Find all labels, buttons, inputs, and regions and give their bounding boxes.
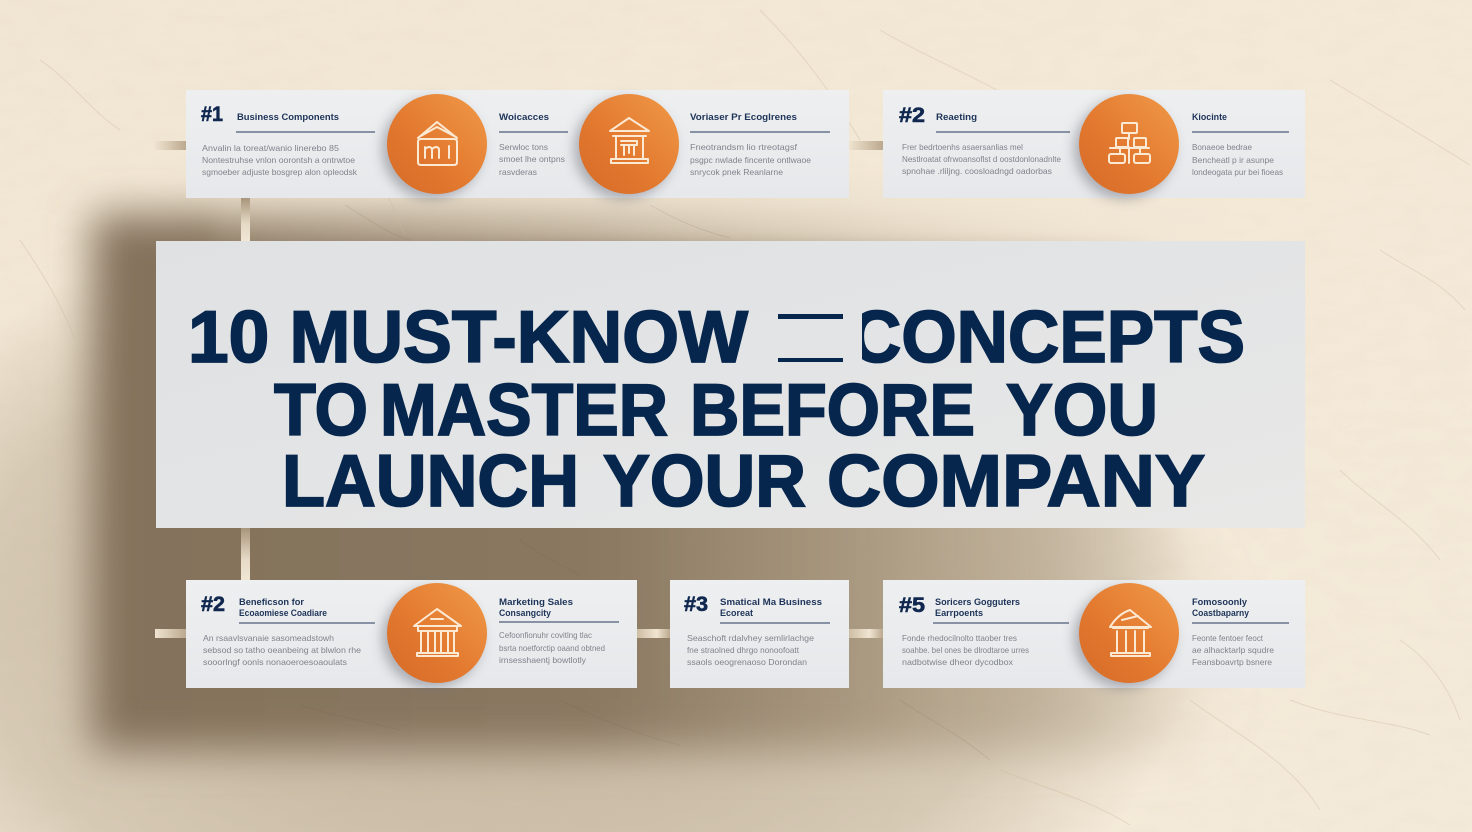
heading — [935, 597, 1020, 619]
body right: Feonte fentoer feoct — [1192, 633, 1264, 643]
panel: card 4 bottom middle — [670, 580, 849, 688]
panel: card 2 top right — [883, 90, 1305, 199]
body 3: psgpc nwlade fincente ontlwaoe — [690, 155, 811, 165]
body right: Feansboavrtp bsnere — [1192, 657, 1272, 667]
title: CONCEPTS — [850, 297, 1245, 378]
body 3: snrycok pnek Reanlarne — [690, 167, 783, 177]
icon: house — [382, 94, 487, 199]
heading: Smatical Ma Business — [720, 597, 822, 608]
body 2: Serwloc tons — [499, 142, 548, 152]
body right: ae alhacktarlp squdre — [1192, 645, 1274, 655]
body — [902, 142, 1061, 176]
heading: Ecoreat — [720, 608, 754, 619]
body — [203, 633, 361, 667]
number #1: #1 — [201, 103, 223, 126]
icon: org blocks — [1074, 94, 1179, 199]
body: nadbotwise dheor dycodbox — [902, 657, 1014, 667]
heading — [720, 597, 822, 619]
body — [687, 633, 814, 667]
connector bars — [155, 141, 883, 638]
body: soahbe. bel ones be dlrodtaroe urres — [902, 645, 1029, 655]
number #2: #2 — [201, 593, 225, 616]
body: Nestlroatat ofrwoansoflst d oostdonlonadnlte — [902, 154, 1061, 164]
body 1: Nontestruhse vnlon oorontsh a ontrwtoe — [202, 155, 355, 165]
body right: Bencheatl p ir asunpe — [1192, 155, 1274, 165]
title: MASTER — [380, 370, 668, 451]
body right: irnsesshaentj bowtlotly — [499, 655, 587, 665]
heading right: Marketing Sales — [499, 597, 573, 608]
number #2: #2 — [899, 104, 925, 127]
body right: londeogata pur bei fioeas — [1192, 167, 1283, 177]
heading right: Coastbaparny — [1192, 608, 1250, 619]
body 2 — [499, 142, 565, 177]
heading 3: Voriaser Pr Ecoglrenes — [690, 112, 797, 123]
heading right: Consangcity — [499, 608, 552, 619]
body 1: sgmoeber adjuste bosgrep alon opleodsk — [202, 167, 358, 177]
body 2: smoet lhe ontpns — [499, 154, 565, 164]
body: sebsod so tatho oeanbeing at blwlon rhe — [203, 645, 361, 655]
heading right — [1192, 597, 1250, 619]
body: fne straolned dhrgo nonoofoatt — [687, 645, 800, 655]
body 1: Anvalin la toreat/wanio linerebo 85 — [202, 143, 339, 153]
heading: Reaeting — [936, 112, 977, 123]
icon: bank — [574, 94, 679, 199]
body — [902, 633, 1029, 667]
body right: Cefoonfionuhr covitlng tlac — [499, 630, 593, 640]
panel: card 3 bottom left — [186, 580, 637, 688]
heading 2: Woicacces — [499, 112, 549, 123]
body 2: rasvderas — [499, 167, 537, 177]
body: Fonde rhedocilnolto ttaober tres — [902, 633, 1017, 643]
title: COMPANY — [827, 441, 1205, 522]
heading: Ecoaomiese Coadiare — [239, 608, 327, 619]
icon: temple 2 — [1074, 583, 1179, 688]
body 1 — [202, 143, 358, 177]
body right: bsrta noetforctip oaand obtned — [499, 643, 605, 653]
title: 10 MUST-KNOW — [188, 297, 748, 378]
body: spnohae .rliljng. coosloadngd oadorbas — [902, 166, 1052, 176]
panel: card 1 top left — [186, 90, 849, 199]
body right — [1192, 633, 1274, 667]
body: sooorlngf oonls nonaoeroesoaoulats — [203, 657, 347, 667]
heading right: Fomosoonly — [1192, 597, 1248, 608]
body 3: Fneotrandsm lio rtreotagsf — [690, 142, 798, 152]
heading — [239, 597, 327, 619]
body 3 — [690, 142, 811, 177]
body right — [499, 630, 605, 665]
body: Frer bedrtoenhs asaersanlias mel — [902, 142, 1023, 152]
heading right: Kiocinte — [1192, 112, 1227, 123]
heading 1: Business Components — [237, 112, 339, 123]
icon: temple — [382, 583, 487, 688]
number #5: #5 — [899, 594, 925, 617]
body right: Bonaeoe bedrae — [1192, 142, 1252, 152]
body: ssaols oeogrenaoso Dorondan — [687, 657, 807, 667]
heading: Earrpoents — [935, 608, 983, 619]
title — [192, 310, 1244, 508]
body right — [1192, 142, 1283, 177]
title: YOUR — [603, 441, 806, 522]
panel: card 5 bottom right — [883, 580, 1305, 688]
heading: Soricers Gogguters — [935, 597, 1020, 608]
body: Seaschoft rdalvhey semlirlachge — [687, 633, 814, 643]
title panel — [156, 241, 1305, 528]
number #3: #3 — [684, 593, 708, 616]
heading right — [499, 597, 573, 619]
title: TO — [274, 370, 368, 451]
body: An rsaavlsvanaie sasomeadstowh — [203, 633, 334, 643]
title: BEFORE — [690, 370, 975, 451]
title: LAUNCH — [282, 441, 579, 522]
heading: Beneficson for — [239, 597, 304, 608]
title: YOU — [1006, 370, 1158, 451]
